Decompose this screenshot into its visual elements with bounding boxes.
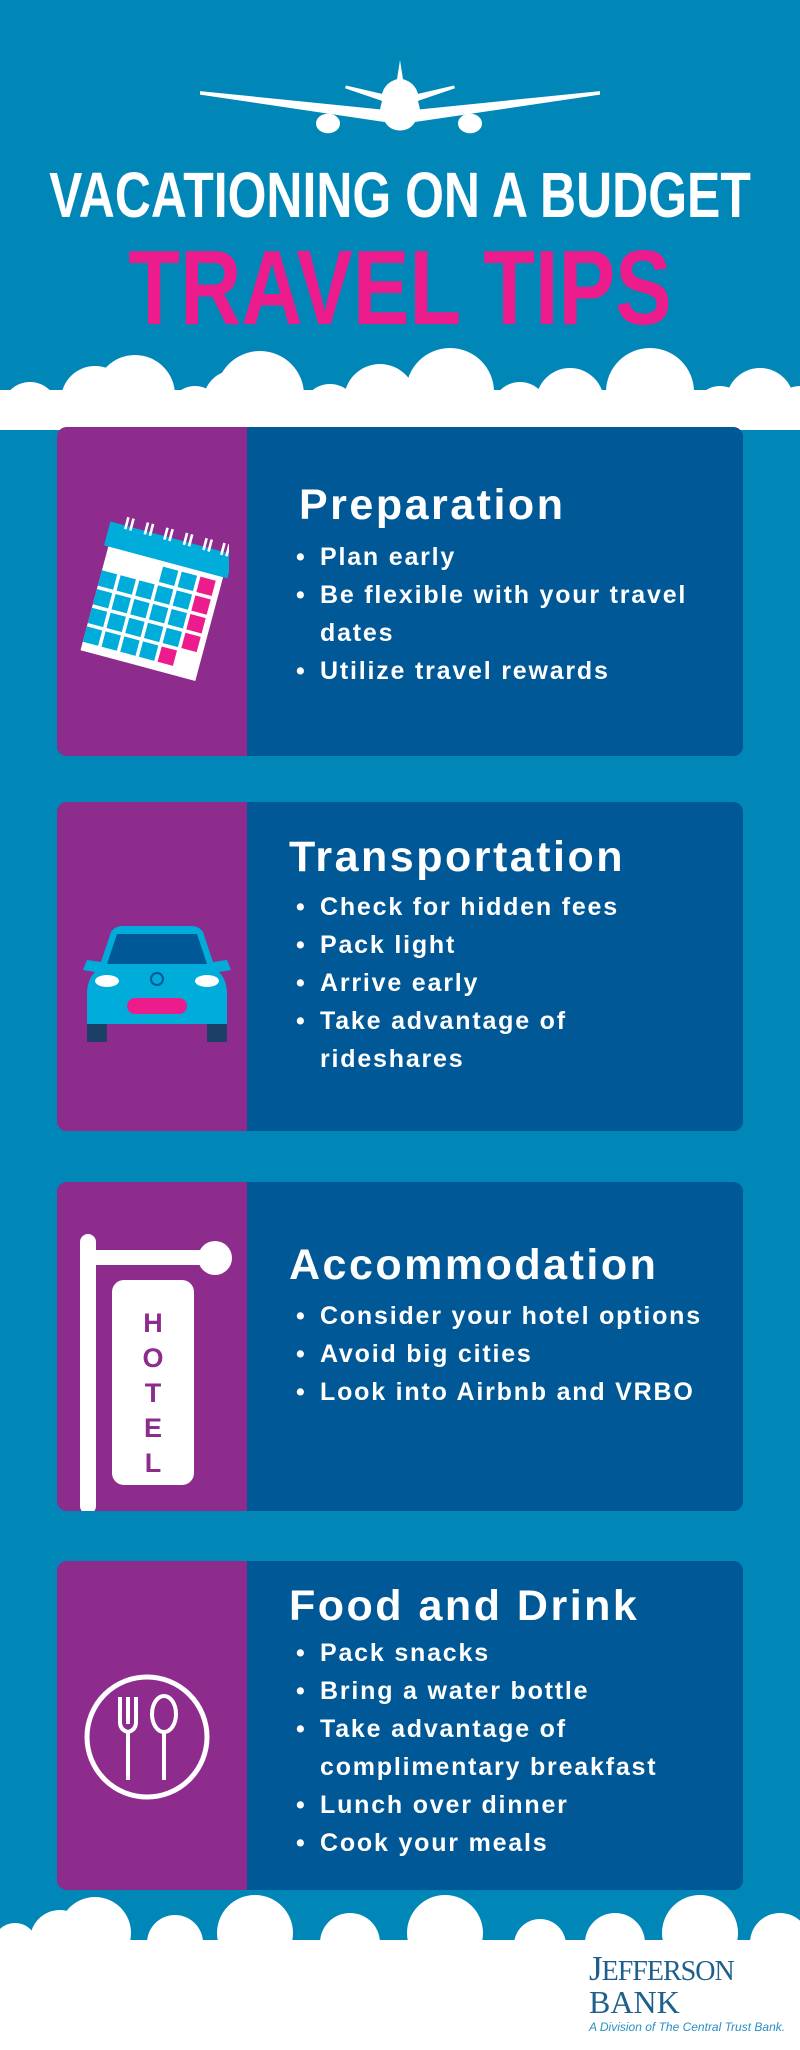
- logo: Jefferson Bank: [589, 1949, 734, 2020]
- bullet list: transportation: rideshares: [320, 1045, 464, 1073]
- airplane icon: [200, 60, 600, 134]
- heading: preparation: Preparation: [299, 481, 565, 529]
- heading: food and drink: Food and Drink: [289, 1582, 639, 1630]
- bottom clouds: [0, 1895, 800, 2050]
- icon: hotel sign: H: [143, 1308, 163, 1338]
- panel: preparation: [57, 427, 743, 756]
- bullet list: food and drink: Lunch over dinner: [320, 1791, 569, 1819]
- bullet list: transportation: Pack light: [320, 931, 456, 959]
- bullet list: preparation: Utilize travel rewards: [320, 657, 610, 685]
- bullet list: food and drink: [296, 1639, 657, 1857]
- logo: Jefferson Bank: JEFFERSON: [589, 1949, 734, 1988]
- bullet list: food and drink: Take advantage of: [320, 1715, 567, 1743]
- bullet list: food and drink: Pack snacks: [320, 1639, 490, 1667]
- bullet list: food and drink: Cook your meals: [320, 1829, 548, 1857]
- bullet list: accommodation: Consider your hotel options: [320, 1302, 702, 1330]
- logo: Jefferson Bank: BANK: [589, 1984, 680, 2020]
- heading: transportation: Transportation: [289, 833, 625, 881]
- bullet list: preparation: Be flexible with your travel: [320, 581, 687, 609]
- icon: hotel sign: T: [145, 1378, 162, 1408]
- icon: hotel sign: E: [144, 1413, 162, 1443]
- bullet list: preparation: Plan early: [320, 543, 456, 571]
- icon: hotel sign: L: [145, 1448, 161, 1478]
- bullet list: preparation: dates: [320, 619, 394, 647]
- bullet list: transportation: Arrive early: [320, 969, 479, 997]
- bullet list: transportation: Check for hidden fees: [320, 893, 619, 921]
- heading: accommodation: Accommodation: [289, 1241, 658, 1289]
- bullet list: accommodation: Look into Airbnb and VRBO: [320, 1378, 695, 1406]
- panel: transportation: [57, 802, 743, 1131]
- bullet list: transportation: [296, 893, 619, 1073]
- icon: plate with fork and spoon: [84, 1674, 210, 1800]
- icon: hotel sign: O: [142, 1343, 164, 1373]
- bullet list: food and drink: Bring a water bottle: [320, 1677, 589, 1705]
- bullet list: accommodation: Avoid big cities: [320, 1340, 533, 1368]
- panel: accommodation: [57, 1182, 743, 1511]
- logo tagline: A Division of The Central Trust Bank.: [589, 2020, 785, 2034]
- top clouds: [0, 348, 800, 430]
- icon: car: [83, 926, 231, 1042]
- icon: hotel sign: [80, 1234, 232, 1511]
- icon: calendar: [80, 516, 229, 681]
- bullet list: transportation: Take advantage of: [320, 1007, 567, 1035]
- title: VACATIONING ON A BUDGET: [49, 159, 751, 231]
- subtitle: TRAVEL TIPS: [128, 229, 672, 347]
- bullet list: preparation: [296, 543, 687, 685]
- panel: food and drink: [57, 1561, 743, 1890]
- bullet list: accommodation: [296, 1302, 702, 1406]
- bullet list: food and drink: complimentary breakfast: [320, 1753, 657, 1781]
